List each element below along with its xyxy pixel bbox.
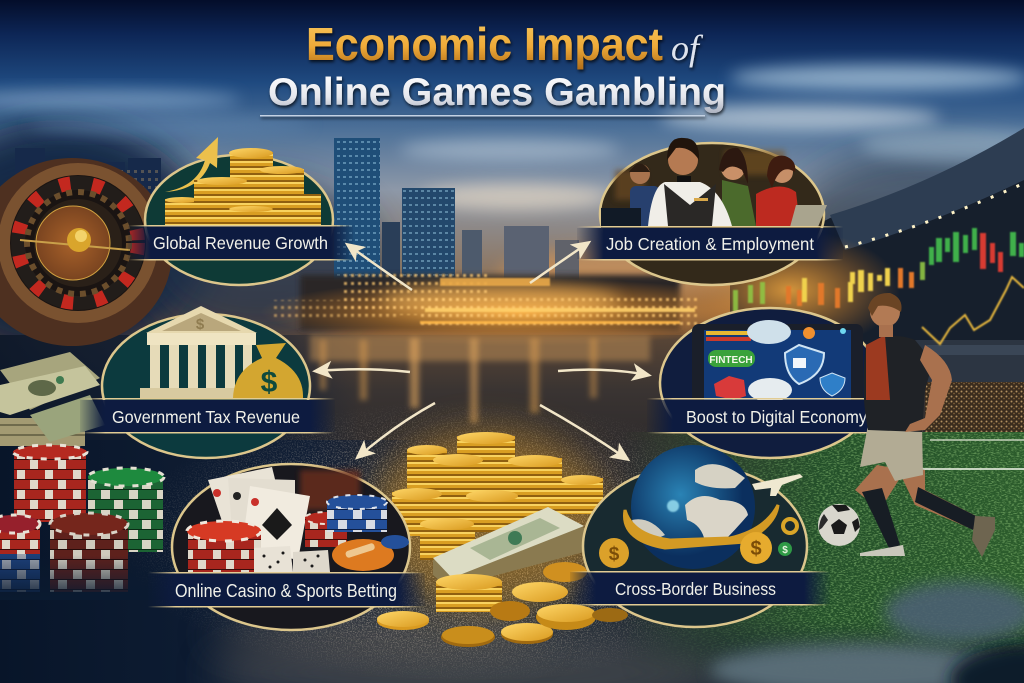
label bar bbox=[577, 226, 843, 260]
icon: money bag: $ bbox=[261, 366, 278, 399]
panel: online casino and sports betting bbox=[148, 464, 425, 630]
label bar: Global Revenue Growth bbox=[153, 233, 328, 253]
icon: fintech tablet: FINTECH bbox=[709, 355, 753, 366]
icon: fintech tablet bbox=[692, 320, 863, 404]
grass pitch bbox=[620, 432, 1024, 683]
label bar bbox=[148, 572, 425, 608]
label bar: Boost to Digital Economy bbox=[686, 407, 867, 427]
icon: globe bbox=[631, 445, 755, 569]
water reflection bbox=[310, 335, 650, 423]
label bar bbox=[647, 398, 905, 434]
panel: global revenue growth bbox=[128, 137, 353, 285]
label bar bbox=[80, 398, 335, 434]
icon: dollar coins bbox=[599, 519, 797, 568]
arrow: to job creation bbox=[530, 243, 588, 283]
icon: gold coin stacks bbox=[165, 148, 321, 225]
arrow: to online casino bbox=[358, 403, 435, 457]
icon: betting token bbox=[332, 535, 409, 571]
arrow: to digital economy bbox=[558, 370, 648, 375]
icon: playing cards bbox=[208, 467, 310, 560]
panel: boost to digital economy bbox=[647, 308, 905, 458]
footballer bbox=[855, 293, 995, 557]
label bar: Government Tax Revenue bbox=[112, 407, 300, 427]
central gold coins and banknotes bbox=[370, 430, 628, 647]
label bar: Cross-Border Business bbox=[615, 579, 776, 599]
poker chip stacks bbox=[0, 445, 170, 600]
icon: casino chips bbox=[187, 495, 387, 572]
icon: bank building: $ bbox=[196, 316, 205, 333]
icon: staff group bbox=[601, 138, 827, 228]
arrow: to global revenue growth bbox=[348, 245, 412, 290]
candlestick chart bbox=[733, 228, 1024, 344]
icon: dollar coins: $ bbox=[609, 544, 620, 565]
label bar: Online Casino & Sports Betting bbox=[175, 581, 397, 601]
arrow: to government tax revenue bbox=[316, 369, 410, 372]
title: Online Games Gambling bbox=[268, 71, 726, 114]
title: Economic Impact bbox=[306, 18, 663, 70]
panel: government tax revenue bbox=[80, 306, 335, 458]
title bbox=[260, 18, 726, 116]
icon: dollar coins: $ bbox=[782, 545, 788, 556]
roulette wheel bbox=[0, 158, 172, 346]
panel: cross-border business bbox=[570, 445, 830, 627]
icon: dollar coins: $ bbox=[750, 538, 762, 560]
city skyline bbox=[15, 138, 780, 346]
icon: airplane bbox=[752, 474, 803, 496]
stadium backdrop bbox=[680, 128, 1024, 432]
label bar: Job Creation & Employment bbox=[606, 234, 814, 254]
icon: money bag bbox=[233, 343, 303, 399]
panel: job creation bbox=[577, 138, 843, 285]
arrow: to cross-border business bbox=[540, 405, 627, 459]
label bar bbox=[570, 571, 830, 606]
icon: bank building bbox=[140, 306, 260, 398]
icon: rising gold arrow bbox=[165, 137, 218, 192]
icon: dice bbox=[254, 546, 330, 572]
label bar bbox=[128, 225, 353, 260]
icon: gold orbit ribbon bbox=[624, 505, 778, 548]
title: of bbox=[671, 28, 704, 68]
cash pile bbox=[0, 352, 105, 446]
football bbox=[818, 504, 860, 546]
